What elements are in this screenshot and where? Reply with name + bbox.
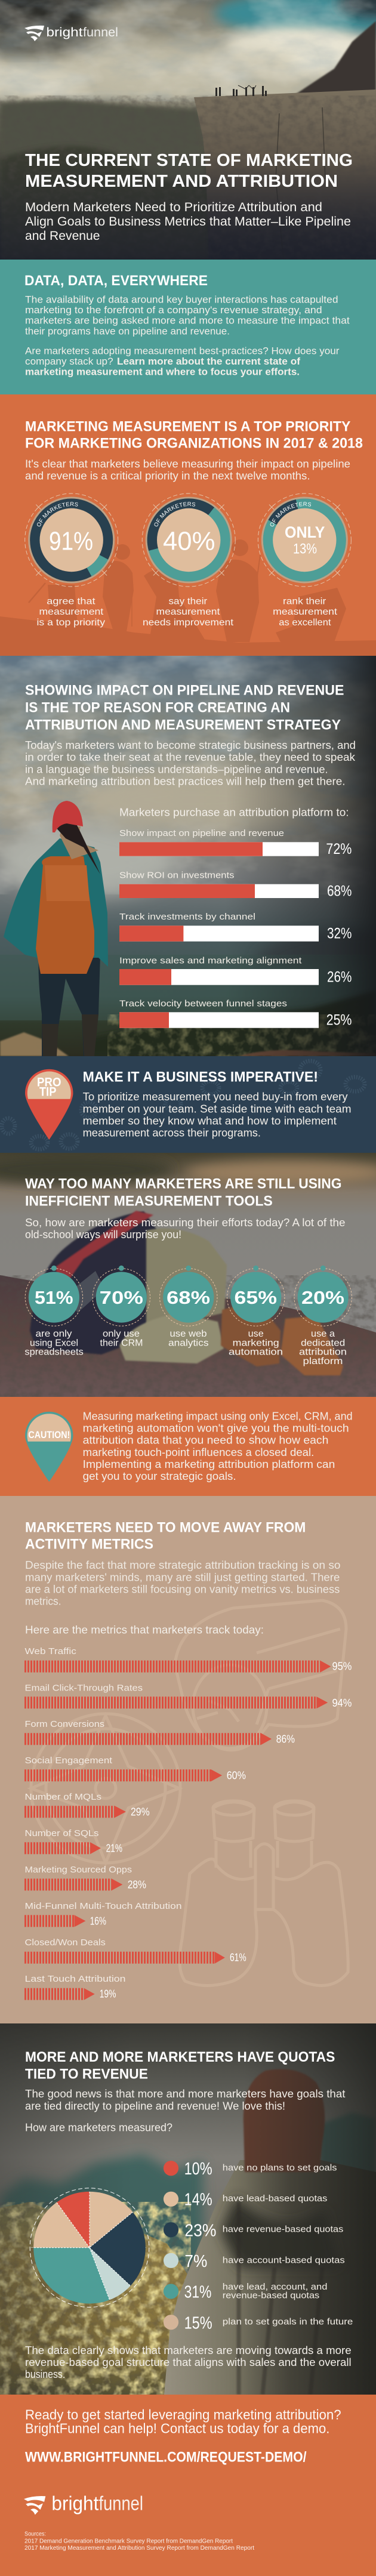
panel: footer call to action: [0, 2395, 376, 2576]
stat: 20%: 20%: [301, 1287, 344, 1308]
heading: top priority: [25, 419, 363, 452]
stat: 51%: spreadsheets: [24, 1347, 84, 1358]
bar: 25%: 25%: [326, 1011, 352, 1028]
stat: 20%: dedicated: [301, 1338, 345, 1348]
stat: 70%: 70%: [100, 1287, 143, 1308]
text block: old-school ways: [25, 1217, 345, 1241]
stat: 51%: are only: [36, 1329, 72, 1339]
stat: 65%: use: [248, 1329, 264, 1339]
metric: marketing sourced opps: Marketing Sourced Opps: [25, 1865, 132, 1875]
metric: last touch attribution: Last Touch Attribution: [25, 1974, 125, 1984]
stat: 20%: use a: [311, 1329, 335, 1339]
bar: 25%: Track velocity between funnel stages: [119, 999, 287, 1009]
hiker silhouettes: [0, 539, 376, 656]
bar: 72%: Show impact on pipeline and revenue: [119, 828, 284, 838]
metric: email click-through rates: Email Click-Through Rates: [25, 1683, 143, 1693]
legend row: 7%: 7%: [184, 2252, 207, 2271]
stat: 20%: attribution: [299, 1347, 347, 1358]
text block: caution: Measuring marketing impact using only Excel, CRM, and: [83, 1410, 353, 1422]
text block: best practices: company stack up?: [25, 356, 113, 367]
stat: 20%: platform: [303, 1356, 343, 1366]
legend row: 7%: [164, 2252, 345, 2271]
logo: brightfunnel footer: funnel: [99, 2492, 143, 2515]
metric: closed/won deals: [24, 1938, 246, 1964]
metric: mid-funnel multi-touch attribution: Mid-Funnel Multi-Touch Attribution: [25, 1901, 181, 1911]
heading: business imperative: MAKE IT A BUSINESS IMPERATIVE!: [83, 1069, 318, 1085]
bar chart: attribution platform reasons: [119, 828, 352, 1028]
pie chart: quota types: [30, 2188, 149, 2307]
caption: 91%: is a top priority: [37, 618, 105, 628]
bar: 32%: [119, 912, 352, 942]
text block: conclusion: [25, 2344, 352, 2380]
metric: closed/won deals: 61%: [230, 1952, 246, 1964]
text block: conclusion: business.: [25, 2368, 65, 2380]
text block: vanity metrics: [25, 1559, 340, 1607]
text block: best practices: [25, 345, 340, 378]
legend row: 31%: [164, 2282, 327, 2302]
caption: 40%: measurement: [156, 607, 220, 617]
panel: activity metrics: [0, 1496, 376, 2023]
caption: 91%: agree that: [47, 596, 95, 606]
stat: 68%: analytics: [168, 1338, 209, 1348]
text block: pro tip: member so they know what and how to implement: [83, 1115, 337, 1127]
metric: form conversions: [24, 1719, 295, 1745]
legend row: 14%: [164, 2191, 327, 2210]
logo: brightfunnel footer: bright: [51, 2492, 98, 2515]
heading: quotas: [25, 2049, 335, 2082]
donut chart: 91%: 91%: [49, 527, 93, 556]
text block: caution: [83, 1410, 353, 1482]
backpack and boots background photo: [0, 1153, 376, 1397]
donut chart: 91%: OF MARKETERS: [37, 502, 78, 526]
text block: vanity metrics: are a lot of marketers still focusing on vanity metrics vs. business: [25, 1583, 340, 1595]
stat: 65%: 65%: [234, 1287, 277, 1308]
metric: number of MQLs: Number of MQLs: [25, 1792, 101, 1802]
bar: 26%: 26%: [327, 969, 352, 986]
text block: pro tip: [83, 1091, 352, 1139]
metric: form conversions: Form Conversions: [25, 1719, 104, 1729]
arrow bar chart: metrics: [24, 1646, 352, 2000]
donut chart: only 13%: [258, 493, 352, 587]
heading: inefficient tools: WAY TOO MANY MARKETERS ARE STILL USING: [25, 1176, 341, 1192]
text: how are marketers measured: How are marketers measured?: [25, 2122, 172, 2134]
metric: web traffic: Web Traffic: [25, 1646, 76, 1656]
text block: good news: are tied directly to pipeline and revenue! We love this!: [25, 2100, 285, 2112]
bar: 32%: Track investments by channel: [119, 912, 255, 922]
text block: caution: marketing touch-point influences a closed deal.: [83, 1446, 314, 1458]
legend row: 7%: have account-based quotas: [223, 2255, 345, 2265]
icon: pro tip pin: PRO: [37, 1076, 61, 1090]
metric: closed/won deals: Closed/Won Deals: [25, 1938, 106, 1948]
logo: brightfunnel: [24, 26, 118, 41]
heading: activity metrics: [25, 1520, 306, 1553]
text block: good news: The good news is that more and more marketers have goals that: [25, 2088, 345, 2100]
heading: pipeline and revenue: SHOWING IMPACT ON PIPELINE AND REVENUE: [25, 682, 344, 698]
heading: quotas: MORE AND MORE MARKETERS HAVE QUOTAS: [25, 2049, 335, 2065]
caption: 40%: say their: [168, 596, 208, 606]
heading: data everywhere: DATA, DATA, EVERYWHERE: [24, 273, 208, 289]
icon: caution pin: CAUTION!: [28, 1429, 70, 1440]
panel: quotas: [0, 2023, 376, 2395]
caption: 91%: [37, 596, 105, 628]
sources: 2017 Demand Generation Benchmark Survey Report from DemandGen Report: [24, 2537, 233, 2544]
stat: 20%: [294, 1266, 352, 1366]
sky and coast background photo: [0, 656, 376, 1056]
metric: last touch attribution: [24, 1974, 125, 2000]
text block: strategic partners: [25, 739, 356, 788]
decorative outline icons: watch, compass, binoculars: [31, 1600, 348, 1986]
chart heading: metrics tracked: Here are the metrics that marketers track today:: [25, 1624, 264, 1636]
metric: number of MQLs: 29%: [131, 1806, 150, 1818]
text block: strategic partners: Today's marketers want to become strategic business partners, and: [25, 739, 356, 751]
donut chart: only 13%: 13%: [293, 541, 317, 557]
text block: data availability: marketing to the forefront of a company's revenue strategy, and: [25, 304, 322, 316]
legend row: 15%: 15%: [184, 2313, 212, 2333]
metric: number of SQLs: 21%: [106, 1843, 122, 1855]
metric: marketing sourced opps: [24, 1865, 146, 1891]
metric: number of SQLs: Number of SQLs: [25, 1828, 99, 1838]
forest and person background photo: [0, 2023, 376, 2395]
metric: number of MQLs: [24, 1792, 150, 1818]
icon: caution pin: [25, 1412, 73, 1482]
panel: caution: [25, 1412, 352, 1482]
legend row: 10%: 10%: [184, 2159, 212, 2179]
text block: conclusion: The data clearly shows that marketers are moving towards a more: [25, 2344, 352, 2356]
text block: priority intro: and revenue is a critical priority in the next twelve months.: [25, 470, 310, 482]
text block: caution: get you to your strategic goals.: [83, 1470, 236, 1482]
text block: priority intro: [25, 458, 350, 482]
panel: pro tip: [0, 1056, 376, 1153]
text block: caution: Implementing a marketing attribution platform can: [83, 1458, 335, 1470]
legend row: 14%: 14%: [184, 2191, 212, 2210]
subtitle: Modern Marketers Need to Prioritize Attribution and: [25, 200, 322, 214]
legend row: 10%: have no plans to set goals: [223, 2162, 337, 2173]
donut chart: 40%: OF MARKETERS: [154, 502, 196, 526]
logo: brightfunnel: funnel: [83, 26, 118, 39]
metric: number of SQLs: [24, 1828, 122, 1855]
bar: 68%: Show ROI on investments: [119, 871, 234, 881]
panel: hero: [0, 0, 376, 260]
bar: 68%: 68%: [327, 883, 352, 900]
text block: strategic partners: in order to take their seat at the revenue table, they need to speak: [25, 751, 356, 763]
metric: email click-through rates: [24, 1683, 352, 1709]
caption: 91%: measurement: [39, 607, 104, 617]
bar: 72%: [119, 828, 352, 857]
text block: caution: attribution data that you need to show how each: [83, 1434, 328, 1446]
stat: 68%: use web: [169, 1329, 207, 1339]
metric: email click-through rates: 94%: [332, 1697, 352, 1709]
bar: 72%: 72%: [326, 841, 352, 857]
text block: call to action: [25, 2407, 341, 2436]
text block: strategic partners: in a language the business understands–pipeline and revenue.: [25, 763, 328, 775]
panel: pipeline and revenue: [0, 656, 376, 1056]
text block: good news: [25, 2088, 345, 2112]
text block: data availability: The availability of data around key buyer interactions has catapulted: [25, 294, 338, 305]
heading: activity metrics: ACTIVITY METRICS: [25, 1537, 153, 1553]
sources: [24, 2530, 254, 2552]
caption: 13%: measurement: [273, 607, 338, 617]
heading: pipeline and revenue: IS THE TOP REASON FOR CREATING AN: [25, 699, 290, 715]
caption: 40%: needs improvement: [143, 618, 234, 628]
metric: marketing sourced opps: 28%: [128, 1879, 146, 1891]
metric: form conversions: 86%: [276, 1733, 295, 1745]
text block: vanity metrics: many marketers' minds, many are still just getting started. There: [25, 1571, 340, 1583]
text block: best practices: Learn more about the current state of: [117, 356, 300, 367]
stat: 65%: automation: [229, 1347, 283, 1358]
legend row: 23%: [164, 2221, 343, 2240]
link: request demo: WWW.BRIGHTFUNNEL.COM/REQUEST-DEMO/: [25, 2449, 307, 2465]
legend row: 31%: revenue-based quotas: [223, 2290, 319, 2300]
donut chart: 91%: [24, 493, 118, 587]
text block: priority intro: It's clear that marketers believe measuring their impact on pipeline: [25, 458, 350, 470]
heading: top priority: FOR MARKETING ORGANIZATIONS IN 2017 & 2018: [25, 436, 363, 452]
stat: 51%: [24, 1266, 84, 1358]
stat: 65%: [227, 1266, 285, 1358]
panel: inefficient tools: [0, 1153, 376, 1397]
text block: vanity metrics: metrics.: [25, 1595, 61, 1607]
donut chart: 40%: [142, 493, 236, 587]
panel: data everywhere: [0, 260, 376, 394]
text block: call to action: BrightFunnel can help! Contact us today for a demo.: [25, 2420, 329, 2436]
text block: pro tip: To prioritize measurement you need buy-in from every: [83, 1091, 348, 1103]
text block: strategic partners: And marketing attribution best practices will help them get there.: [25, 776, 345, 788]
chart heading: Marketers purchase an attribution platform to:: [119, 807, 349, 819]
metric: social engagement: [24, 1756, 246, 1782]
logo: brightfunnel footer: [24, 2492, 143, 2515]
legend: quota types: [164, 2159, 353, 2333]
icon: pro tip pin: [25, 1069, 73, 1140]
sources: 2017 Marketing Measurement and Attribution Survey Report from DemandGen Report: [24, 2544, 254, 2552]
text block: caution: marketing automation won't give you the multi-touch: [83, 1422, 349, 1434]
caption: 13%: rank their: [283, 596, 326, 606]
legend row: 31%: 31%: [184, 2283, 211, 2302]
caption: 13%: as excellent: [279, 618, 331, 628]
metric: mid-funnel multi-touch attribution: [24, 1901, 181, 1927]
metric: social engagement: Social Engagement: [25, 1756, 113, 1766]
text block: pro tip: member on your team. Set aside time with each team: [83, 1103, 352, 1115]
heading: activity metrics: MARKETERS NEED TO MOVE AWAY FROM: [25, 1520, 306, 1536]
bar: 32%: 32%: [327, 925, 352, 942]
stat: 68%: 68%: [167, 1287, 210, 1308]
legend row: 23%: have revenue-based quotas: [223, 2225, 343, 2235]
caption: 13%: [273, 596, 338, 628]
stat: 70%: their CRM: [100, 1338, 143, 1348]
bar: 26%: Improve sales and marketing alignment: [119, 955, 302, 965]
legend row: 15%: plan to set goals in the future: [223, 2316, 353, 2327]
text block: conclusion: revenue-based goal structure that aligns with sales and the overall: [25, 2356, 352, 2368]
bar: 26%: [119, 955, 352, 986]
text block: call to action: Ready to get started leveraging marketing attribution?: [25, 2407, 341, 2422]
text block: best practices: Are marketers adopting measurement best-practices? How does your: [25, 345, 340, 356]
heading: inefficient tools: INEFFICIENT MEASUREMENT TOOLS: [25, 1193, 273, 1210]
donut chart: only 13%: ONLY: [285, 523, 325, 541]
legend row: 10%: [164, 2159, 337, 2179]
stat: 70%: only use: [103, 1329, 140, 1339]
title: [25, 151, 353, 191]
subtitle: [25, 200, 351, 243]
text block: data availability: marketers are being asked more and more to measure the impact that: [25, 315, 350, 326]
hero people on the cliff: [215, 85, 267, 96]
icon: pro tip pin: TIP: [39, 1085, 56, 1099]
stat: 70%: [93, 1266, 150, 1348]
donut chart: 40%: 40%: [163, 527, 215, 556]
title: THE CURRENT STATE OF MARKETING: [25, 151, 353, 170]
logo: brightfunnel: bright: [47, 26, 83, 39]
metric: mid-funnel multi-touch attribution: 16%: [90, 1915, 106, 1927]
metric: web traffic: [24, 1646, 352, 1673]
heading: pipeline and revenue: ATTRIBUTION AND MEASUREMENT STRATEGY: [25, 717, 341, 733]
stat: 51%: 51%: [35, 1287, 73, 1308]
legend row: 31%: have lead, account, and: [223, 2282, 327, 2292]
heading: pipeline and revenue: [25, 682, 344, 733]
text block: data availability: their programs have on pipeline and revenue.: [25, 325, 230, 337]
legend row: 15%: [164, 2313, 353, 2333]
heading: inefficient tools: [25, 1176, 341, 1210]
stat: 65%: marketing: [233, 1338, 279, 1348]
bar: 68%: [119, 871, 352, 900]
subtitle: and Revenue: [25, 229, 100, 243]
text block: best practices: marketing measurement and where to focus your efforts.: [25, 366, 300, 378]
caption: 40%: [143, 596, 234, 628]
metric: social engagement: 60%: [227, 1770, 246, 1782]
stat: 51%: using Excel: [30, 1338, 78, 1348]
heading: top priority: MARKETING MEASUREMENT IS A TOP PRIORITY: [25, 419, 350, 435]
donut chart: only 13%: OF MARKETERS: [270, 502, 312, 526]
text block: old-school ways: old-school ways will surprise you!: [25, 1229, 181, 1241]
legend row: 14%: have lead-based quotas: [223, 2194, 327, 2204]
subtitle: Align Goals to Business Metrics that Matter–Like Pipeline: [25, 215, 351, 229]
title: MEASUREMENT AND ATTRIBUTION: [25, 172, 338, 191]
hero background photo: cliff and sky: [0, 0, 376, 260]
text block: data availability: [25, 294, 350, 337]
legend row: 23%: 23%: [184, 2221, 216, 2240]
metric: last touch attribution: 19%: [100, 1988, 116, 2000]
sources: Sources:: [24, 2530, 46, 2537]
metric: web traffic: 95%: [332, 1660, 352, 1672]
bar: 25%: [119, 999, 352, 1028]
stat: 68%: [160, 1266, 217, 1348]
text block: pro tip: measurement across their programs.: [83, 1127, 261, 1139]
text block: old-school ways: So, how are marketers measuring their efforts today? A lot of the: [25, 1217, 345, 1229]
text block: vanity metrics: Despite the fact that more strategic attribution tracking is on so: [25, 1559, 340, 1571]
panel: top priority: [0, 419, 376, 656]
heading: quotas: TIED TO REVENUE: [25, 2066, 148, 2082]
photo subject: woman hiker: [4, 801, 108, 1056]
